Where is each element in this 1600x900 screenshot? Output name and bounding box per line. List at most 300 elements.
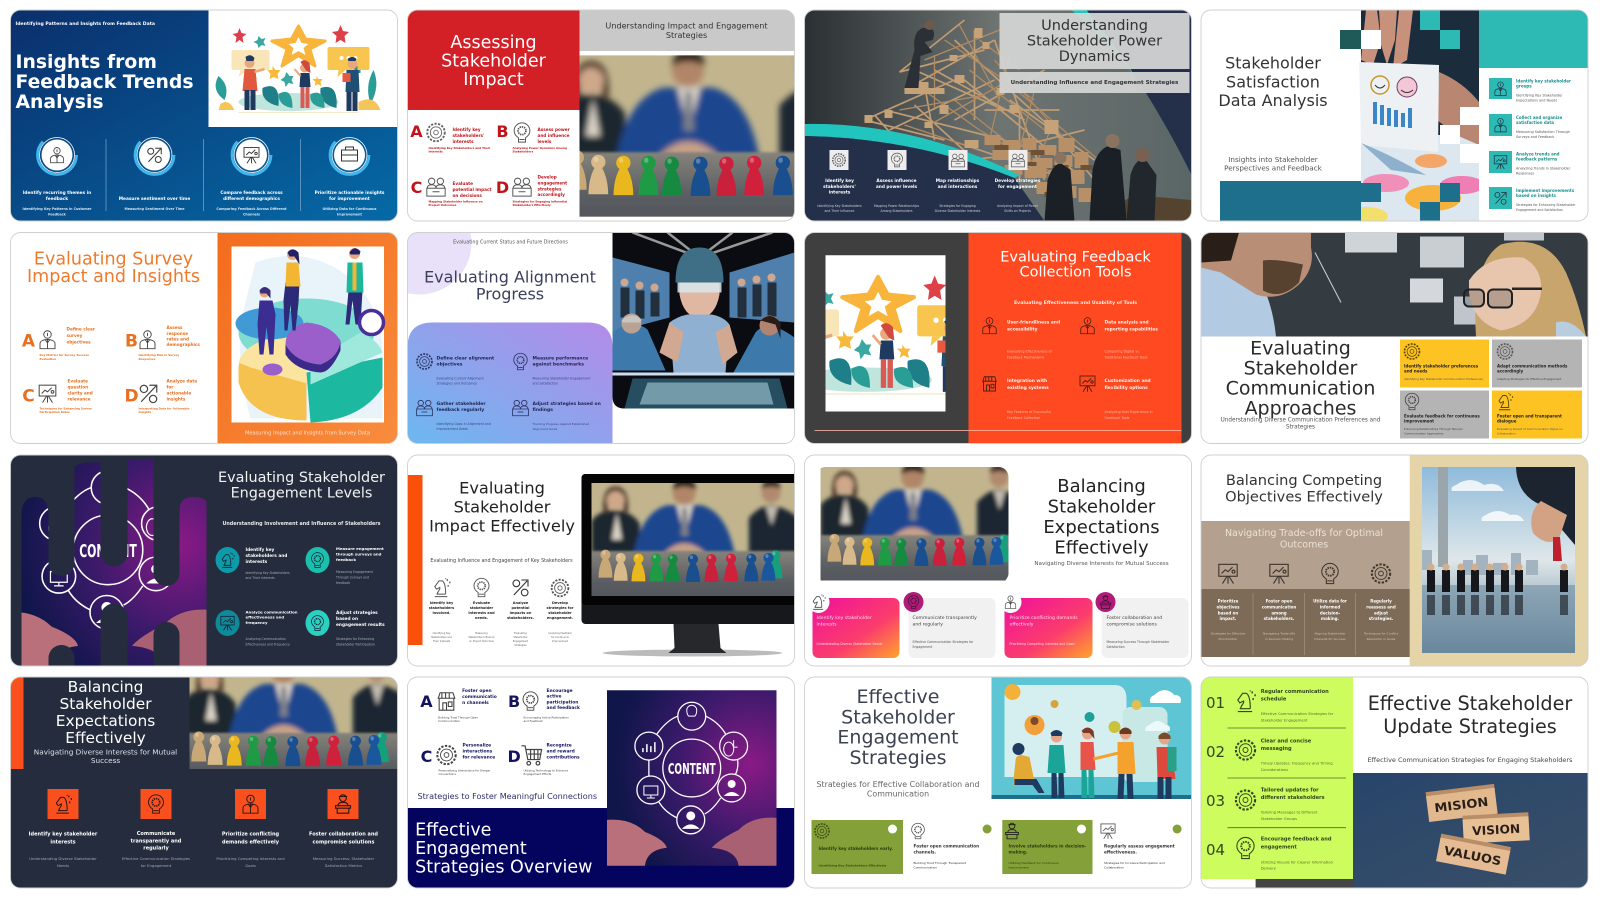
item 2: and Satisfaction [532, 382, 558, 386]
subtitle: Insights into Stakeholder [1228, 155, 1318, 164]
tan side panel [1410, 455, 1588, 666]
item 3: Map relationships [936, 178, 980, 184]
column 4 [309, 789, 378, 868]
icon: ring [232, 136, 271, 174]
eyebrow text: Identifying Patterns and Insights from Feedback Data [16, 21, 155, 27]
title: Impact and Insights [27, 267, 200, 287]
item 1: Identifying Key Stakeholders [817, 204, 862, 208]
column 3 [216, 789, 285, 868]
item 3: Improvement Areas [436, 427, 468, 431]
title: Evaluating Feedback [1000, 250, 1151, 266]
item 4: Alignment Goals [532, 427, 558, 431]
title: Stakeholder [1048, 496, 1156, 518]
column 1: Prioritization [1219, 637, 1238, 641]
item 1: Evaluating Effectiveness of [1007, 350, 1053, 354]
item 2 [514, 353, 591, 386]
column 4: Techniques for Conflict [1363, 631, 1399, 635]
column 1 [22, 136, 92, 216]
title: Stakeholder [59, 695, 152, 713]
red title block: Impact [463, 70, 524, 90]
item D [507, 742, 580, 776]
item D: Develop [538, 175, 557, 180]
column 2: stakeholders. [1264, 616, 1295, 621]
column 2: Stakeholder Influence [468, 636, 495, 639]
item 03 [1206, 787, 1325, 821]
tile 4: dialogue [1497, 418, 1517, 424]
item 02: messaging [1261, 746, 1292, 752]
item 1 [817, 150, 862, 213]
item 4 [306, 610, 385, 647]
subtitle: Understanding Diverse Communication Preferences and [1221, 418, 1381, 424]
panel: slide 15 stakeholder engagement strategies [804, 677, 1192, 888]
column 3: Evaluating [514, 632, 527, 635]
card 4: Foster collaboration and [1106, 615, 1162, 621]
monitor with photo [553, 444, 833, 656]
panel: slide 9 engagement levels [6, 455, 398, 667]
column 3: Utilize data for [1313, 599, 1347, 604]
photo: mission vision values blocks: VALUOS [1443, 844, 1502, 868]
item D: contributions [546, 754, 580, 760]
item 02: 02 [1206, 743, 1225, 761]
panel: slide 4 stakeholder satisfaction [1201, 10, 1588, 225]
panel: slide 10 stakeholder impact [408, 444, 833, 666]
column 2 [1262, 564, 1296, 641]
icon: ring [135, 136, 174, 174]
card 2: Communication [914, 865, 937, 869]
item 3: and interactions [938, 184, 978, 190]
column 4: strategies. [1369, 616, 1394, 621]
photo: pawns [580, 55, 794, 217]
panel: slide 5 survey impact [10, 232, 398, 444]
item 2: Measure performance [532, 356, 588, 362]
item 1: and Their Interests [246, 576, 275, 580]
item 04: 04 [1206, 841, 1225, 859]
item D: accordingly [538, 192, 565, 197]
item A: Identifying Key Stakeholders and Their [428, 146, 491, 150]
title box: Understanding [1041, 18, 1148, 34]
item B [508, 688, 580, 723]
eyebrow text: Evaluating Current Status and Future Directions [453, 240, 568, 246]
column 3: informed [1320, 604, 1340, 610]
card 4: Regularly assess engagement [1104, 844, 1175, 849]
item 4: Analyzing Impact of Power [997, 204, 1039, 208]
title: Impact Effectively [429, 517, 575, 536]
card 4 [1096, 820, 1188, 874]
card 1 [808, 591, 900, 658]
item B: Analyzing Power Dynamics Among [512, 146, 567, 150]
item 4 [995, 150, 1041, 213]
item 03: 03 [1206, 792, 1225, 810]
card 2: and regularly [912, 622, 943, 628]
item 01 [1206, 689, 1334, 722]
card 3: Involve stakeholders in decision- [1008, 844, 1087, 849]
item C [421, 742, 495, 776]
item 1: stakeholders' [823, 184, 856, 190]
item A: Evaluation [40, 357, 56, 361]
column 3: decision- [1320, 610, 1341, 615]
item 01: Effective Communication Strategies for [1261, 712, 1334, 716]
item D: strategies [538, 186, 562, 191]
item 1: and Their Influence [825, 209, 855, 213]
bottom navy area [804, 136, 1044, 221]
slide background [408, 10, 794, 221]
column 3: Interests for Success [1314, 637, 1346, 641]
slide background [408, 677, 794, 888]
item 2: Through Surveys and [335, 576, 369, 580]
label: Identify recurring themes in [23, 190, 91, 196]
item C: question [68, 384, 88, 390]
column 2: Communicate [137, 831, 176, 837]
item 3: Integration with [1007, 378, 1047, 384]
title: Feedback Trends [16, 72, 194, 93]
item 3: Analyze trends and [1516, 152, 1560, 156]
column 4: Develop [552, 601, 569, 605]
note: Improvement [337, 212, 362, 216]
subtitle: Navigating Diverse Interests for Mutual Success [1034, 561, 1169, 567]
column 4: Measuring Success: Stakeholder [313, 856, 375, 861]
red title block: Assessing [450, 33, 537, 53]
item 01: schedule [1261, 697, 1287, 703]
title: Balancing Competing [1226, 472, 1382, 489]
item 4: Customization and [1104, 378, 1151, 384]
gray subtitle block: Understanding Impact and Engagement [605, 20, 768, 30]
item 4: based on [336, 616, 358, 622]
item B: and feedback [546, 705, 580, 711]
column 1: Identify key [430, 601, 454, 605]
item 2 [1489, 114, 1570, 139]
column 2: transparently and [131, 838, 182, 844]
item 4: Develop strategies [995, 178, 1041, 184]
title: Data Analysis [1218, 91, 1328, 110]
card 4 [1096, 592, 1188, 658]
subtitle: Perspectives and Feedback [1224, 164, 1323, 172]
column 2: Measuring [475, 632, 488, 635]
item 2: feedback [336, 557, 356, 562]
title: Balancing [68, 678, 143, 696]
item 3: existing systems [1007, 385, 1049, 391]
item 4: Feedback Tools [1104, 416, 1130, 420]
card 3: Improvement [1008, 865, 1030, 869]
column 3 [216, 136, 287, 216]
subtitle: Understanding Involvement and Influence of Stakeholders [222, 521, 381, 527]
item 4: Strategies for Enhancing Stakeholder [1516, 203, 1576, 207]
item A: A [22, 332, 36, 352]
column 3 [1313, 563, 1347, 641]
item 04: Utilizing Visuals for Clearer Information [1261, 860, 1334, 864]
slide background [10, 232, 398, 444]
item 4: Adjust strategies based on [532, 401, 601, 407]
item B: and Feedback [524, 719, 543, 723]
caption: Measuring Impact and Insights from Survey Data [245, 430, 370, 436]
item 1: Identifying Key Stakeholders [246, 571, 290, 575]
item 04: Encourage feedback and [1261, 837, 1332, 843]
column 1 [29, 789, 98, 868]
item 1: User-friendliness and [1007, 320, 1060, 326]
panel: slide 3 stakeholder power dynamics [804, 10, 1192, 221]
item D: Stakeholders Effectively [512, 203, 551, 207]
item C: Mapping Stakeholder Influence on [428, 200, 483, 204]
card 2 [906, 820, 996, 874]
item C: Techniques for Enhancing Survey [40, 406, 92, 410]
item 4 [513, 400, 601, 431]
column 3: Strategies [514, 644, 527, 647]
card 4: Strategies for Inclusive Participation and [1104, 861, 1165, 865]
item 3: Identifying Gaps in Alignment and [436, 422, 491, 426]
item 3: Analyze communication [246, 609, 298, 614]
note: Comparing Feedback Across Different [216, 207, 287, 211]
label: Compare feedback across [220, 190, 283, 196]
title: Effective [415, 820, 491, 840]
column 3: Prioritize conflicting [222, 832, 280, 838]
item A: n channels [462, 700, 489, 706]
card 4: Measuring Success Through Stakeholder [1106, 640, 1170, 644]
column 4 [547, 580, 574, 643]
column 4: stakeholder [548, 611, 572, 615]
label: different demographics [223, 196, 280, 202]
column 1: objectives [1216, 604, 1240, 610]
item C: C [22, 386, 35, 406]
column 2 [468, 578, 495, 643]
item A: A [410, 122, 423, 141]
card 2: Foster open communication [914, 844, 979, 849]
photo: woman at control table [612, 232, 794, 408]
item 3: Gather stakeholder [436, 401, 486, 407]
swoosh bottom band [804, 124, 1020, 178]
lime panel [1201, 677, 1353, 879]
title: Approaches [1245, 398, 1356, 420]
tile 1: and needs [1404, 368, 1428, 374]
item 3: feedback regularly [436, 407, 484, 413]
item 2: Among Stakeholders [880, 209, 913, 213]
icon: ring [330, 136, 369, 174]
item 3: Diverse Stakeholder Interests [935, 209, 981, 213]
item C: on decisions [452, 193, 482, 198]
item B: participation [546, 699, 578, 705]
item B: response [166, 331, 188, 336]
title: Strategies Overview [415, 857, 592, 877]
title: Strategies [849, 747, 947, 769]
item 1: Identify key [825, 178, 854, 184]
column 2: for Engagement [141, 863, 172, 868]
item 2: feedback [336, 581, 350, 585]
item 2: through surveys and [336, 551, 382, 556]
right panel [1479, 10, 1588, 221]
card 3: Utilizing Feedback for Continuous [1008, 861, 1059, 865]
item 3: Strategies for Engaging [939, 204, 976, 208]
tile 4 [1492, 390, 1582, 438]
band subtitle: Outcomes [1280, 540, 1328, 551]
item 3: feedback patterns [1516, 156, 1558, 162]
column 3 [507, 580, 534, 647]
item A: Identify key [452, 127, 481, 132]
item B: levels [538, 139, 552, 144]
photo: pawns [190, 678, 398, 769]
panel: slide 1 insights from feedback [10, 10, 398, 220]
item D [496, 175, 567, 207]
orange bar [408, 475, 422, 645]
orange panel [968, 232, 1182, 444]
item A [410, 122, 491, 154]
item D: actionable [166, 390, 191, 396]
item 03: Tailoring Messages to Different [1260, 811, 1318, 815]
item 1: Evaluating Current Alignment [436, 376, 484, 380]
column 1: Identify key stakeholder [29, 832, 98, 838]
item D: D [124, 386, 139, 406]
item 1 [983, 318, 1060, 360]
item 03: Tailored updates for [1261, 787, 1319, 793]
item 4: engagement results [336, 622, 385, 628]
item A [22, 326, 96, 361]
column 2: communication [1262, 604, 1296, 610]
card 3: Prioritizing Competing Interests and Goals [1010, 642, 1075, 646]
column 4: Improvement [552, 640, 568, 643]
item C: Participation Rates [40, 410, 70, 414]
illustration: team meeting [992, 677, 1192, 799]
photo: mission vision values blocks [1353, 773, 1588, 888]
item 3: Analyzing Communication [246, 637, 286, 641]
item 4: Stakeholder Participation [336, 643, 375, 647]
item 3: Responses [1516, 172, 1534, 176]
label: feedback [46, 196, 68, 202]
item 1: groups [1516, 84, 1532, 89]
orange bar [10, 677, 24, 769]
subtitle: Navigating Diverse Interests for Mutual [34, 748, 177, 757]
column 1: Prioritize [1218, 599, 1239, 604]
red title block [408, 10, 580, 110]
item B: Responses [138, 357, 156, 361]
item 2: Measuring Stakeholder Engagement [532, 376, 591, 380]
title: Evaluating Survey [34, 250, 193, 270]
column 3: Stakeholder [513, 636, 528, 639]
slide background [1201, 455, 1588, 666]
tile 1: Identify stakeholder preferences [1404, 364, 1479, 368]
item 4: Strategies for Enhancing [336, 637, 374, 641]
column 3: Prioritizing Competing Interests and [216, 856, 285, 861]
item 3: Analyzing Trends in Stakeholder [1516, 166, 1571, 170]
slide background [10, 455, 398, 666]
item C [411, 178, 491, 207]
item 03: different stakeholders [1261, 795, 1325, 801]
item 1: Identifying Key Stakeholder [1516, 94, 1563, 98]
title: Effectively [1054, 538, 1149, 558]
subtitle: Strategies for Effective Collaboration and [816, 780, 980, 789]
card 3: making. [1008, 850, 1028, 855]
item 3 [935, 150, 981, 213]
item 4: findings [532, 407, 553, 413]
item 4: based on insights [1516, 193, 1556, 198]
column 3: Goals [245, 863, 256, 868]
title: Satisfaction [1226, 72, 1320, 92]
item 2: Data analysis and [1104, 320, 1149, 326]
column 4: engagement. [547, 616, 573, 620]
item B [496, 122, 571, 154]
item 2: Surveys and Feedback [1516, 135, 1554, 139]
card 2: channels. [914, 850, 937, 855]
panel: slide 6 alignment progress [368, 190, 794, 444]
item B: B [496, 122, 509, 141]
card 1: Identify key stakeholders early. [818, 846, 894, 851]
column 2: Foster open [1266, 599, 1293, 604]
column 4: compromise solutions [313, 840, 374, 846]
label: Measure sentiment over time [119, 196, 190, 202]
item B: and influence [538, 133, 570, 138]
title: Progress [476, 284, 544, 304]
item B: active [546, 694, 562, 700]
title box: Dynamics [1059, 49, 1130, 65]
item D: Utilizing Technology to Enhance [524, 768, 568, 772]
card 2 [904, 592, 996, 658]
band subtitle: Navigating Trade-offs for Optimal [1225, 528, 1383, 539]
column 1: Understanding Diverse Stakeholder [29, 856, 97, 861]
card 4: Satisfaction [1106, 645, 1125, 649]
column 1: based on [1218, 610, 1238, 615]
footer line [814, 430, 1182, 431]
tile 4: Foster open and transparent [1497, 414, 1562, 418]
column 1: Strategies for Effective [1211, 631, 1245, 635]
panel: slide 14 engagement strategies overview [408, 677, 794, 888]
item B: B [125, 332, 138, 352]
brown band [1201, 589, 1410, 657]
item B: Identifying Bias in Survey [138, 353, 179, 357]
tile 1 [1400, 340, 1489, 388]
panel: slide 11 balancing expectations light [783, 429, 1192, 666]
slide background [408, 455, 794, 666]
column 2: among [1271, 610, 1287, 615]
tile 3: Enhancing Relationships Through Tailored [1404, 427, 1463, 431]
item 2: satisfaction data [1516, 120, 1554, 125]
slide background [408, 232, 794, 444]
column 2: stakeholder [470, 606, 493, 610]
photo: mission vision values blocks: MISION [1434, 795, 1489, 815]
title: Stakeholder [841, 706, 955, 728]
slide background [10, 10, 398, 221]
photo: wooden network [804, 10, 1192, 221]
illustration: star feedback [208, 10, 398, 127]
item D: Engagement Efforts [524, 772, 552, 776]
item 4 [1080, 376, 1153, 420]
item 1 [216, 547, 290, 580]
item D: Insights [138, 410, 151, 414]
note: Utilizing Data for Continuous [323, 207, 377, 211]
item 2: Measuring Satisfaction Through [1516, 130, 1570, 134]
item 2 [306, 546, 384, 585]
item 1: accessibility [1007, 326, 1038, 332]
item 3: Effectiveness and Frequency [246, 643, 290, 647]
item 2: Comparing Digital vs [1104, 350, 1139, 354]
tile 3 [1400, 390, 1489, 438]
mosaic squares [1220, 10, 1479, 221]
item A: objectives [66, 340, 91, 344]
item B: Stakeholders [512, 150, 534, 154]
item C: interactions [462, 748, 493, 754]
title box [1000, 13, 1190, 69]
title: Evaluating [1250, 338, 1351, 360]
item C: Project Outcomes [428, 203, 457, 207]
column 2: interests and [468, 611, 495, 615]
item 02 [1206, 738, 1333, 772]
tile 2: Adapting Strategies for Effective Engagement [1497, 377, 1562, 381]
card 1: Understanding Diverse Stakeholder Needs [816, 642, 883, 646]
panel: slide 13 balancing expectations dark [10, 618, 443, 888]
item B [125, 325, 200, 361]
title: Effectively [65, 729, 146, 747]
photo: mission vision values blocks: VISION [1472, 822, 1520, 838]
card 4: effectiveness. [1104, 850, 1137, 855]
column 1: Stakeholders and [431, 636, 452, 639]
gray subtitle block [580, 10, 794, 51]
column 3: Aligning Stakeholder [1314, 631, 1346, 635]
item 03: Stakeholder Groups [1261, 817, 1297, 821]
